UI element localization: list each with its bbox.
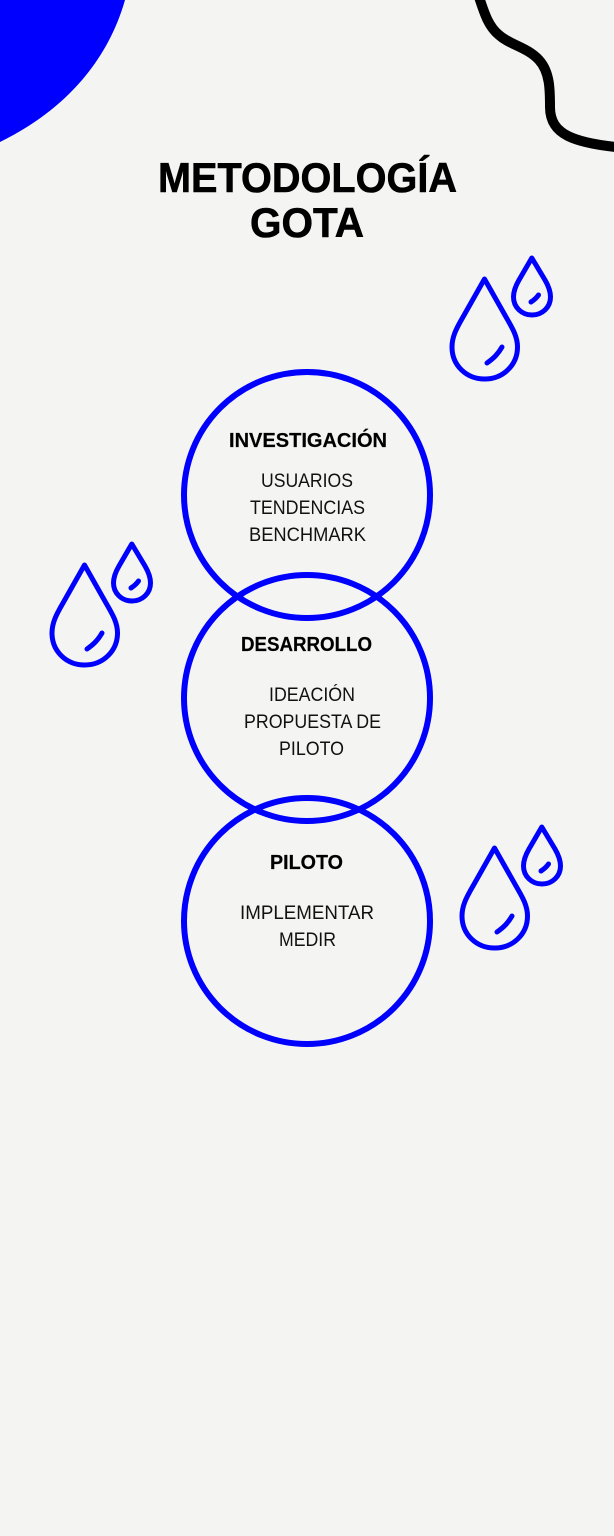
decorative blue quarter shape xyxy=(0,0,125,142)
circle: investigación xyxy=(184,372,430,618)
text block: investigación xyxy=(229,428,387,546)
title xyxy=(158,154,457,246)
text block: piloto: IMPLEMENTAR xyxy=(240,902,374,924)
title: GOTA xyxy=(250,199,364,246)
circle: piloto xyxy=(184,798,430,1044)
icon: water drops left xyxy=(52,544,150,665)
text block: desarrollo xyxy=(241,634,381,760)
title: METODOLOGÍA xyxy=(158,154,457,201)
text block: investigación: INVESTIGACIÓN xyxy=(229,428,387,452)
text block: piloto: MEDIR xyxy=(279,929,336,951)
text block: desarrollo: PILOTO xyxy=(279,738,344,760)
text block: piloto xyxy=(240,852,374,951)
text block: desarrollo: DESARROLLO xyxy=(241,634,372,656)
text block: desarrollo: PROPUESTA DE xyxy=(244,711,381,733)
text block: investigación: BENCHMARK xyxy=(249,524,366,546)
icon: water drops top right xyxy=(452,258,550,379)
text block: piloto: PILOTO xyxy=(270,852,343,874)
text block: investigación: TENDENCIAS xyxy=(250,497,365,519)
text block: desarrollo: IDEACIÓN xyxy=(269,683,355,706)
text block: investigación: USUARIOS xyxy=(261,470,353,492)
circle: desarrollo xyxy=(184,575,430,821)
decorative black wavy line xyxy=(479,0,614,147)
icon: water drops lower right xyxy=(462,827,560,948)
